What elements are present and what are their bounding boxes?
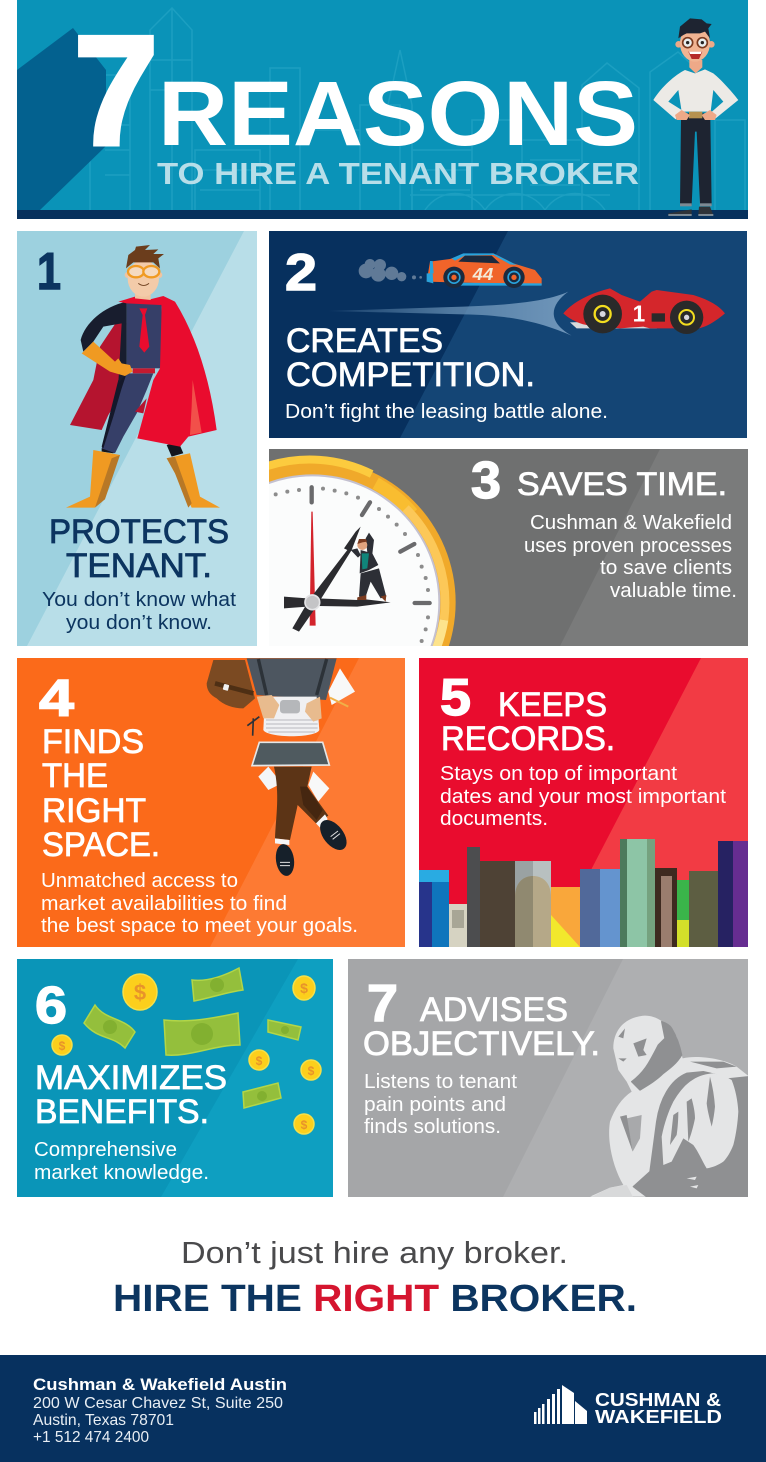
icon: row of books bbox=[419, 839, 748, 947]
icon: gold coins: $ bbox=[301, 1118, 308, 1132]
icon: superhero bbox=[66, 245, 220, 508]
panel: 5 keeps records: dates and your most important bbox=[440, 786, 726, 808]
panel: 4 finds the right space: SPACE. bbox=[42, 826, 160, 864]
icon: money bills bbox=[84, 968, 301, 1108]
description: Cushman & Wakefield bbox=[530, 512, 732, 534]
icon: businessman bbox=[653, 18, 738, 216]
panel: 4 finds the right space: the best space to meet your goals. bbox=[41, 915, 358, 937]
panel: 4 finds the right space: RIGHT bbox=[42, 792, 146, 830]
panel: 6 maximizes benefits: market knowledge. bbox=[34, 1162, 209, 1184]
icon: gold coins: $ bbox=[308, 1064, 315, 1078]
title word: REASONS bbox=[158, 63, 638, 165]
panel: 4 finds the right space: market availabilities to find bbox=[41, 893, 287, 915]
panel: 6 maximizes benefits: BENEFITS. bbox=[35, 1093, 209, 1131]
icon: clock bbox=[269, 456, 456, 646]
heading: SAVES TIME. bbox=[517, 466, 727, 502]
icon: gold coins: $ bbox=[134, 980, 146, 1005]
panel: 1 protects tenant: TENANT. bbox=[66, 547, 212, 585]
call to action: HIRE THE RIGHT BROKER. bbox=[113, 1278, 637, 1320]
icon: red race car bbox=[563, 288, 725, 334]
icon: exhaust smoke bbox=[359, 259, 422, 282]
panel: 6 maximizes benefits bbox=[17, 959, 333, 1197]
skyline outline bbox=[90, 8, 745, 210]
panel: 5 keeps records bbox=[419, 658, 748, 947]
long shadow of the seven bbox=[17, 28, 106, 210]
panel: 1 protects tenant: you don’t know. bbox=[66, 612, 212, 634]
panel: 5 keeps records: RECORDS. bbox=[441, 720, 615, 758]
subtitle: TO HIRE A TENANT BROKER bbox=[157, 156, 639, 191]
logo: Cushman & Wakefield bbox=[534, 1385, 722, 1427]
heading: FINDS bbox=[42, 723, 144, 761]
icon: gold coins: $ bbox=[256, 1054, 263, 1068]
address: 200 W Cesar Chavez St, Suite 250 bbox=[33, 1395, 283, 1412]
icon: person with laptop from above bbox=[207, 658, 355, 877]
footer bbox=[0, 1355, 766, 1462]
description: Comprehensive bbox=[34, 1139, 177, 1161]
icon: red race car: 1 bbox=[633, 301, 645, 327]
number 5: 5 bbox=[440, 669, 471, 727]
footer band of header bbox=[17, 210, 748, 219]
number 7: 7 bbox=[367, 975, 398, 1033]
icon: thinker statue bbox=[590, 1016, 749, 1198]
heading: MAXIMIZES bbox=[35, 1059, 227, 1097]
closing statement bbox=[113, 1235, 637, 1320]
description: Listens to tenant bbox=[364, 1071, 517, 1093]
panel: 7 advises objectively bbox=[348, 959, 749, 1198]
office name: Cushman & Wakefield Austin bbox=[33, 1375, 287, 1394]
icon: stock car 44: 44 bbox=[472, 264, 493, 284]
description: Don’t fight the leasing battle alone. bbox=[285, 401, 608, 423]
address: Austin, Texas 78701 bbox=[33, 1412, 174, 1429]
panel: 7 advises objectively: finds solutions. bbox=[364, 1116, 501, 1138]
number 3: 3 bbox=[471, 452, 501, 510]
logo: Cushman & Wakefield: WAKEFIELD bbox=[595, 1407, 722, 1427]
icons: race cars bbox=[328, 253, 725, 336]
title numeral: 7 bbox=[74, 4, 158, 177]
panel: 1 protects tenant bbox=[17, 231, 257, 646]
heading: ADVISES bbox=[420, 991, 568, 1029]
icon: gold coins: $ bbox=[300, 980, 308, 996]
icon: gold coins: $ bbox=[59, 1039, 66, 1053]
icon: speed swoosh bbox=[328, 292, 572, 336]
panel: 2 creates competition bbox=[269, 231, 747, 438]
address bbox=[33, 1395, 283, 1446]
panel: header banner bbox=[17, 0, 748, 219]
businessman pushing clock hand bbox=[351, 533, 386, 602]
icon: gold coins bbox=[52, 974, 321, 1134]
panel: 4 finds the right space: THE bbox=[42, 757, 108, 795]
heading: CREATES bbox=[286, 322, 443, 360]
panel: 7 advises objectively: pain points and bbox=[364, 1094, 506, 1116]
tagline: Don’t just hire any broker. bbox=[181, 1235, 568, 1270]
heading: PROTECTS bbox=[49, 513, 229, 551]
panel: 7 advises objectively: OBJECTIVELY. bbox=[363, 1025, 600, 1063]
number 6: 6 bbox=[35, 977, 67, 1035]
panel: 3 saves time: to save clients bbox=[600, 557, 732, 579]
panel: 3 saves time bbox=[269, 449, 748, 646]
icon: stock car 44 bbox=[427, 253, 542, 288]
heading: KEEPS bbox=[498, 686, 607, 724]
description: You don’t know what bbox=[42, 589, 236, 611]
panel: 5 keeps records: documents. bbox=[440, 808, 548, 830]
number 1: 1 bbox=[37, 243, 61, 301]
panel: 2 creates competition: COMPETITION. bbox=[286, 356, 535, 394]
number 4: 4 bbox=[39, 670, 74, 728]
description: Unmatched access to bbox=[41, 870, 238, 892]
panel: 4 finds the right space bbox=[17, 658, 405, 947]
panel: 3 saves time: valuable time. bbox=[610, 580, 737, 602]
logo: Cushman & Wakefield: CUSHMAN & bbox=[595, 1390, 721, 1410]
number 2: 2 bbox=[285, 244, 317, 302]
panel: 3 saves time: uses proven processes bbox=[524, 535, 732, 557]
address: +1 512 474 2400 bbox=[33, 1429, 149, 1446]
description: Stays on top of important bbox=[440, 763, 677, 785]
